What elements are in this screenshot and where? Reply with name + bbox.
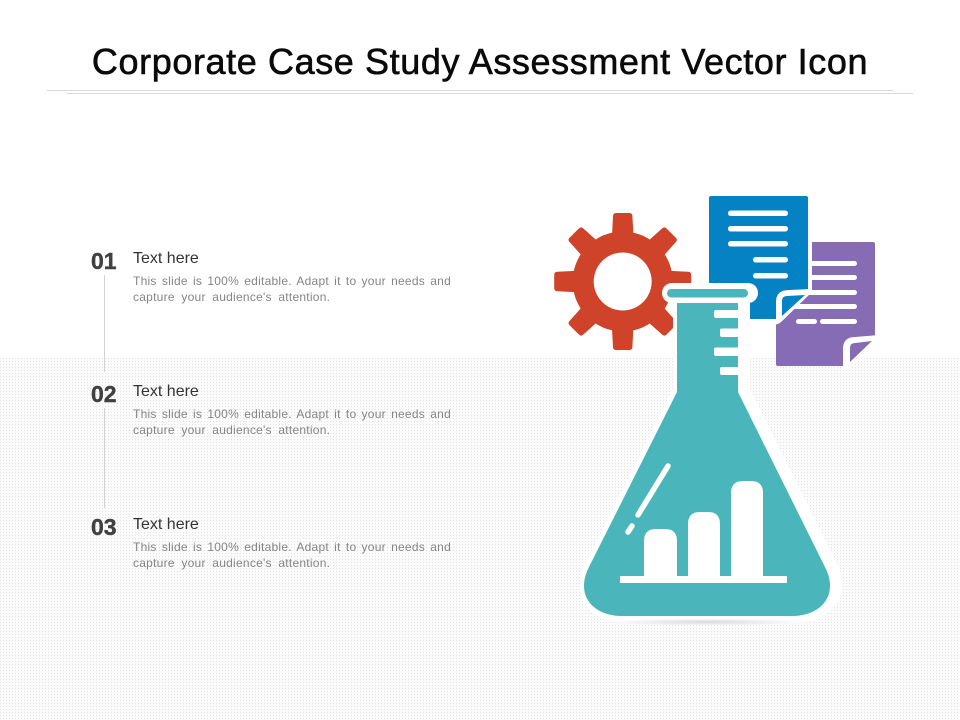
flask glass highlight	[628, 466, 668, 532]
icon: purple document	[776, 242, 879, 368]
icon: flask halo	[588, 283, 834, 615]
item 01	[91, 248, 451, 304]
title underline	[47, 90, 913, 94]
icon: gear	[554, 213, 691, 350]
timeline connector 2	[104, 408, 105, 508]
heading 3: Text here	[133, 516, 199, 533]
heading 2: Text here	[133, 383, 199, 400]
icon: flask	[584, 289, 830, 616]
timeline connector 1	[104, 275, 105, 372]
item 02	[91, 381, 451, 437]
description 2: This slide is 100% editable. Adapt it to your needs and	[133, 407, 451, 421]
description 3	[133, 540, 451, 570]
flask body	[584, 303, 830, 616]
heading 1: Text here	[133, 250, 199, 267]
description 3: capture your audience's attention.	[133, 556, 330, 570]
description 2	[133, 407, 451, 437]
title: Corporate Case Study Assessment Vector Icon	[92, 41, 868, 82]
description 1	[133, 274, 451, 304]
flask shadow	[607, 618, 807, 626]
number 03: 03	[91, 514, 117, 540]
description 1: capture your audience's attention.	[133, 290, 330, 304]
flask scale marks	[714, 310, 738, 375]
number 01: 01	[91, 248, 117, 274]
description 2: capture your audience's attention.	[133, 423, 330, 437]
number 02: 02	[91, 381, 117, 407]
description 3: This slide is 100% editable. Adapt it to your needs and	[133, 540, 451, 554]
icon: blue document	[700, 190, 812, 325]
description 1: This slide is 100% editable. Adapt it to your needs and	[133, 274, 451, 288]
flask rim	[667, 289, 748, 298]
bar chart	[620, 481, 787, 583]
item 03	[91, 514, 451, 570]
